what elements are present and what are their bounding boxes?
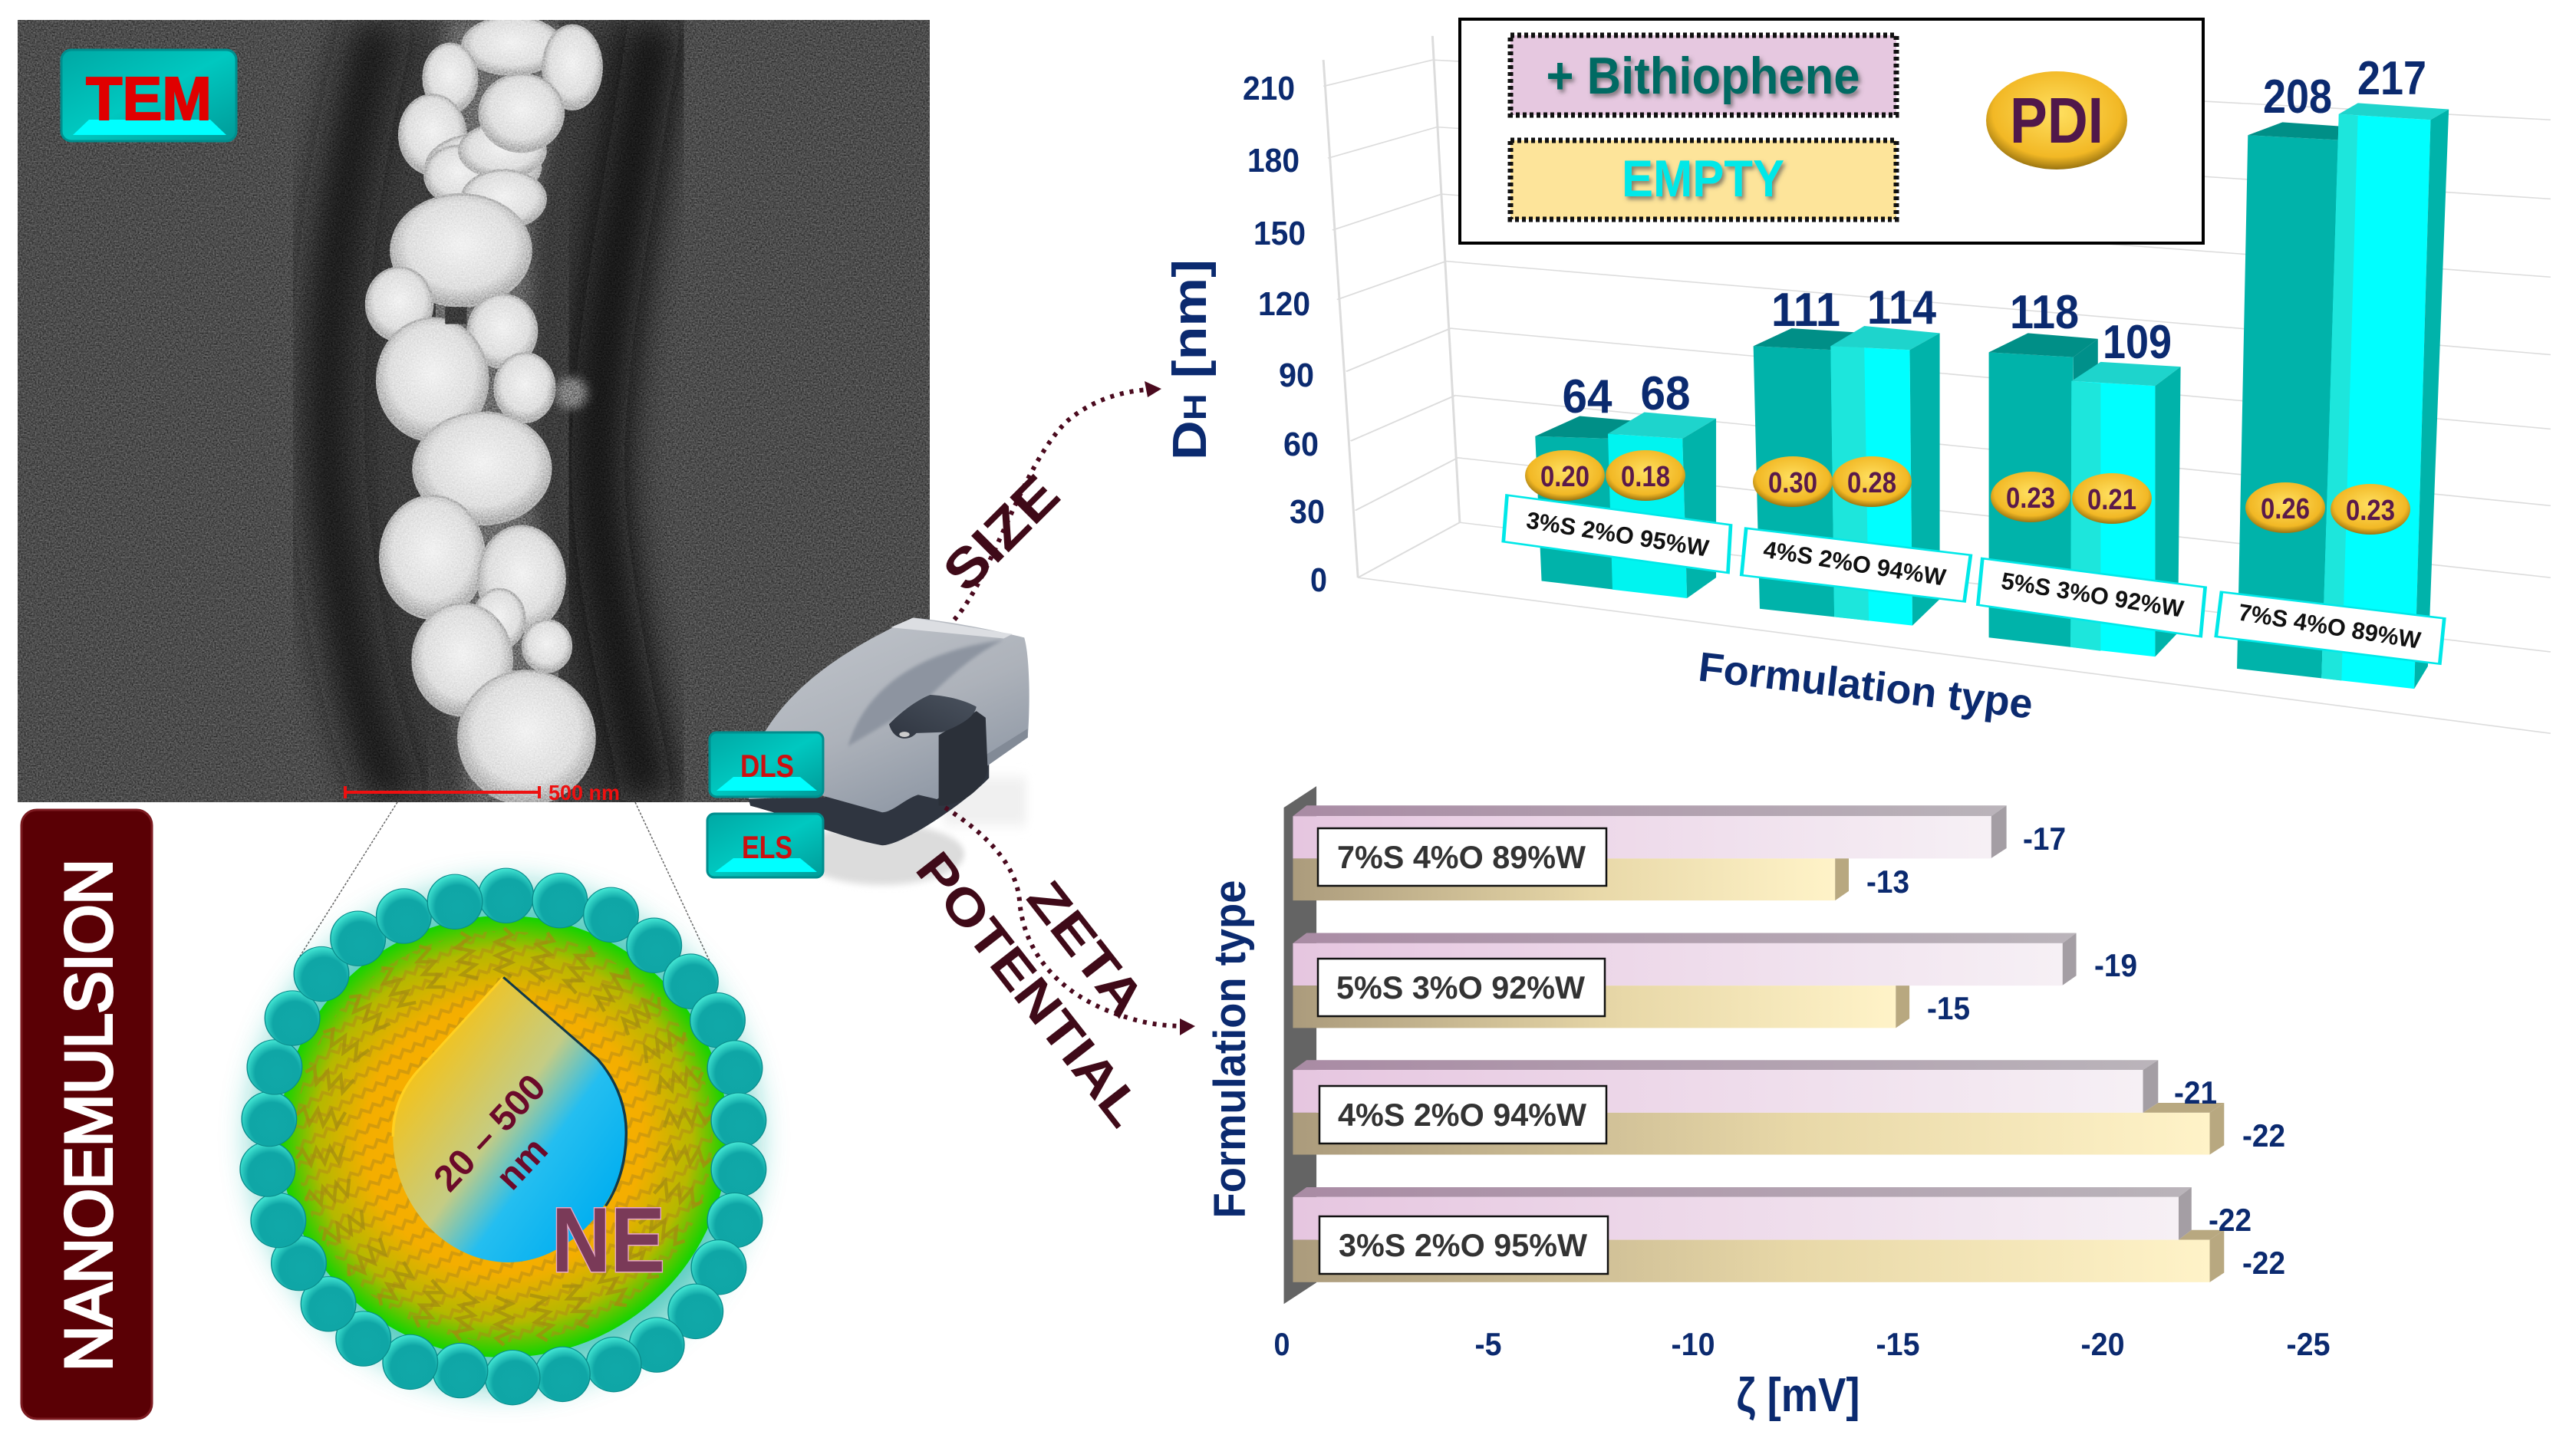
badge: DLS [710,732,823,797]
y axis tick labels: 120 [1258,285,1310,323]
bar label text [1336,839,1587,1263]
zeta value labels: -15 [1927,990,1970,1026]
bar label text: 3%S 2%O 95%W [1339,1227,1587,1263]
bar value labels: 111 [1771,284,1840,337]
badge: ELS: ELS [742,829,792,865]
y axis tick labels: 180 [1247,142,1300,179]
NE label: NE [552,1189,665,1292]
size range label: 20 – 500 [427,1067,554,1199]
y axis tick labels: 0 [1310,561,1327,599]
formulation tag text: 3%S 2%O 95%W [1524,507,1711,562]
formulation tag text: 4%S 2%O 94%W [1761,536,1948,591]
bar value labels: 118 [2010,286,2079,339]
badge: TEM [61,50,236,141]
formulation tag text: 5%S 3%O 92%W [1999,568,2186,623]
legend: empty [1510,140,1896,219]
arrow: instrument to size chart [954,381,1161,620]
badge: DLS: DLS [740,748,794,784]
bar value labels: 109 [2103,316,2172,369]
zeta value labels: -22 [2242,1245,2285,1281]
surfactant tails [295,928,713,1345]
x axis tick labels: 0 [1273,1326,1290,1362]
y axis title: DH [nm] [1164,259,1217,460]
legend: PDI marker: PDI [2010,84,2103,156]
x axis title: Formulation type [1696,644,2035,728]
y axis tick labels: 210 [1243,70,1295,107]
PDI gold markers: 0.23 [2346,495,2395,527]
y axis title: Formulation type [1205,880,1255,1218]
formulation tag text [1524,507,2423,654]
bar value labels: 208 [2263,71,2332,123]
zeta value labels: -17 [2023,821,2066,857]
legend: PDI marker [1986,71,2127,169]
PDI gold markers: 0.18 [1621,461,1670,493]
PDI gold markers: 0.23 [2006,482,2055,515]
bar labels [1318,828,1608,1274]
x axis tick labels [1273,1326,2331,1362]
bar value labels: 217 [2357,52,2426,105]
zeta value labels: -22 [2209,1202,2252,1238]
icon: DLS ELS instrument [749,617,1029,885]
zeta value labels: -21 [2174,1074,2217,1111]
PDI gold markers [1525,450,2410,535]
zoom connector lines [298,802,710,961]
x axis title: ζ [mV] [1737,1369,1860,1422]
y axis tick labels [1243,70,1327,599]
legend [1460,19,2203,243]
PDI gold markers: 0.28 [1847,467,1896,499]
legend: empty: EMPTY [1622,150,1784,208]
x axis tick labels: -15 [1876,1326,1919,1362]
label: ZETA: ZETA [1016,870,1157,1027]
zeta value labels [1866,821,2285,1281]
3D bars [1535,103,2449,689]
panel: TEM micrograph [18,17,930,805]
x axis tick labels: -5 [1474,1326,1502,1362]
bar label text: 7%S 4%O 89%W [1337,839,1586,875]
arrow: instrument to zeta chart [945,808,1195,1035]
x axis tick labels: -25 [2286,1326,2331,1362]
TEM particles [367,17,601,805]
zeta value labels: -13 [1866,864,1909,900]
oil core [280,916,728,1357]
diagram: nanoemulsion droplet [240,868,766,1405]
label: SIZE: SIZE [931,463,1072,604]
panel: nanoemulsion vertical title [21,810,152,1419]
bar value labels: 68 [1640,367,1691,420]
surfactant heads [240,868,766,1405]
formulation tags [1504,495,2444,664]
x axis tick labels: -10 [1671,1326,1715,1362]
PDI gold markers: 0.20 [1540,461,1589,493]
formulation tag text: 7%S 4%O 89%W [2236,599,2423,654]
scale bar: 500 nm [548,781,620,805]
bars [1284,786,2224,1304]
chart: hydrodynamic diameter 3D bars [1164,36,2551,733]
y axis tick labels: 150 [1253,215,1306,252]
x axis tick labels: -20 [2080,1326,2125,1362]
scale bar [345,781,620,805]
water drop [393,977,626,1262]
badge: TEM: TEM [86,64,212,133]
y axis tick labels: 90 [1279,357,1314,394]
panel: nanoemulsion vertical title: NANOEMULSION [52,859,126,1371]
size range label: nm [489,1130,556,1198]
grid lines [1323,36,2551,733]
bar value labels: 114 [1867,281,1936,334]
PDI gold markers: 0.30 [1768,467,1817,499]
badge: ELS [707,814,823,877]
bar value labels [1562,52,2426,423]
y axis tick labels: 30 [1290,493,1325,531]
zeta value labels: -22 [2242,1117,2285,1153]
legend: bithiophene: + Bithiophene [1547,47,1860,105]
bar label text: 4%S 2%O 94%W [1338,1097,1586,1133]
zeta value labels: -19 [2094,947,2137,983]
PDI gold markers: 0.26 [2261,493,2310,525]
label: POTENTIAL: POTENTIAL [905,841,1154,1137]
bar value labels: 64 [1562,370,1612,423]
bar label text: 5%S 3%O 92%W [1336,969,1585,1005]
PDI gold markers: 0.21 [2087,484,2136,516]
chart: zeta potential horizontal bars [1205,786,2331,1422]
y axis tick labels: 60 [1283,426,1319,463]
legend: bithiophene [1510,35,1896,115]
